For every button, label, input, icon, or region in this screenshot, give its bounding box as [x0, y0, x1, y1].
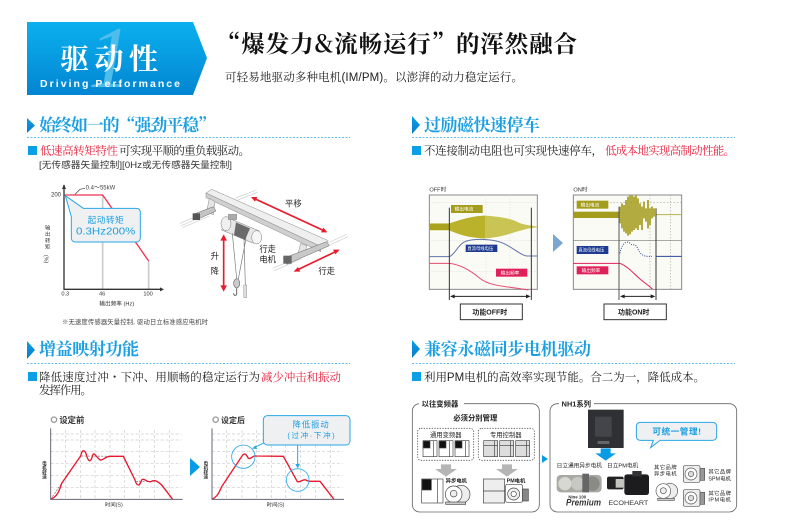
chart: OFF waveform: 输出频率 [501, 269, 520, 276]
diagram: conventional inverter [412, 399, 539, 512]
diagram: conventional inverter: 以往变频器 [422, 399, 459, 408]
description [28, 369, 342, 398]
banner: 驱动性 [27, 10, 207, 107]
chart: output torque vs frequency: 0.4～55kW [86, 185, 116, 191]
chart: before setting [42, 415, 183, 509]
description [412, 142, 735, 158]
chart: output torque vs frequency: 输出频率 (Hz) [99, 299, 134, 307]
description: 不连接制动电阻也可实现快速停车， [424, 142, 603, 158]
chart: ON waveform: ON时 [573, 186, 588, 194]
heading: 始终如一的强劲平稳 [27, 111, 350, 138]
diagram: conventional inverter: PM电机 [507, 476, 526, 484]
description [28, 142, 250, 170]
description: 利用PM电机的高效率实现节能。合二为一，降低成本。 [424, 369, 705, 385]
callout: 起动转矩 [65, 196, 140, 242]
diagram: NH1 series [550, 399, 737, 512]
callout: 起动转矩: 起动转矩 [88, 214, 124, 225]
description: [无传感器矢量控制][0Hz或无传感器矢量控制] [39, 159, 232, 170]
chart: ON waveform: 输出电流 [581, 201, 600, 208]
arrow: to NH1 [542, 455, 548, 463]
motor photos [557, 471, 649, 495]
chart: OFF waveform [429, 186, 537, 320]
arrow: OFF to ON [553, 234, 563, 252]
callout: 起动转矩: 0.3Hz200% [76, 227, 135, 238]
chart: before setting: 时间(S) [105, 501, 123, 509]
chart: after setting: 时间(S) [267, 501, 285, 509]
chart: output torque vs frequency: 输出转矩 [44, 224, 50, 251]
arrow: before to after [190, 458, 200, 476]
chart: output torque vs frequency: 200 [51, 193, 62, 199]
description: 低速高转矩特性 [40, 142, 118, 158]
chart: OFF waveform: 直流母线电压 [467, 245, 494, 252]
label: 功能OFF时: 功能OFF时 [472, 308, 507, 317]
callout: 降低振动: (过冲·下冲) [287, 430, 335, 440]
callout: 降低振动: 降低振动 [293, 419, 329, 429]
arrows: motion directions [220, 197, 340, 292]
subtitle: 可轻易地驱动多种电机(IM/PM)。以澎湃的动力稳定运行。 [225, 69, 523, 85]
description: 降低速度过冲・下冲、用顺畅的稳定运行为 [39, 369, 260, 385]
diagram: NH1 series: 异步电机 [654, 470, 677, 478]
panel: 兼容永磁同步电机驱动 [412, 335, 737, 512]
panel: 增益映射功能 [27, 335, 350, 509]
crane labels: 行走 [259, 244, 277, 254]
heading: 始终如一的强劲平稳: 始终如一的“强劲平稳” [39, 111, 215, 136]
footnote: ※无速度传感器矢量控制, 驱动日立标准感应电机时 [62, 317, 209, 326]
diagram: NH1 series: 其它品牌 [708, 489, 732, 497]
chart: output torque vs frequency: (%) [43, 255, 49, 264]
diagram: NH1 series: IPM电机 [708, 496, 732, 504]
description: 低成本地实现高制动性能。 [605, 142, 735, 158]
heading: 增益映射功能: 增益映射功能 [39, 335, 139, 360]
chart: OFF waveform: 输出电流 [455, 206, 474, 213]
diagram: NH1 series: Premium [566, 497, 601, 507]
crane labels: 电机 [259, 254, 277, 264]
diagram: NH1 series: NH1系列 [562, 399, 591, 408]
description: 可实现平顺的重负载驱动。 [119, 142, 250, 158]
banner: 驱动性: Driving Performance [40, 78, 180, 90]
title: “爆发力&流畅运行”的浑然融合 [217, 25, 577, 59]
chart: output torque vs frequency [43, 184, 164, 307]
banner: 驱动性: 1 [88, 10, 132, 107]
diagram: conventional inverter: 专用控制器 [490, 430, 522, 439]
crane labels: 行走 [318, 266, 336, 276]
callout: 降低振动 [263, 416, 350, 445]
diagram: conventional inverter: 异步电机 [446, 476, 468, 484]
diagram: NH1 series: Nine 100 [568, 495, 587, 500]
chart: before setting: 设定前 [59, 415, 84, 425]
callout: 可统一管理 [636, 422, 717, 448]
diagram: NH1 series: 其它品牌 [654, 463, 677, 471]
inverter photo [588, 410, 624, 448]
diagram: conventional inverter: 必须分别管理 [453, 414, 498, 423]
chart: ON waveform: 直流母线电压 [578, 247, 605, 254]
chart: OFF waveform: OFF时 [429, 186, 447, 194]
diagram: conventional inverter: 通用变频器 [430, 430, 462, 439]
chart: ON waveform [573, 186, 682, 320]
chart: after setting: 电机转速 [203, 460, 209, 481]
panel: 过励磁快速停车 [412, 111, 735, 320]
heading: 增益映射功能 [27, 335, 350, 364]
chart: after setting [203, 415, 350, 509]
description: 减少冲击和振动 [261, 369, 342, 385]
panel: 始终如一的强劲平稳 [27, 111, 350, 326]
crane labels: 升 [211, 251, 219, 261]
diagram: NH1 series: 其它品牌 [708, 468, 732, 476]
label: 功能ON时: 功能ON时 [618, 308, 649, 317]
heading: 兼容永磁同步电机驱动 [412, 335, 735, 364]
diagram: NH1 series: 日立PM电机 [607, 462, 639, 470]
chart: output torque vs frequency: 0.3 [61, 292, 69, 298]
crane labels: 平移 [285, 199, 302, 209]
diagram: NH1 series: SPM电机 [708, 474, 732, 482]
illustration: crane [180, 189, 348, 298]
crane labels: 降 [211, 266, 220, 276]
callout: 可统一管理: 可统一管理! [652, 426, 701, 437]
chart: output torque vs frequency: 46 [99, 292, 105, 298]
heading: 兼容永磁同步电机驱动: 兼容永磁同步电机驱动 [424, 335, 591, 360]
chart: ON waveform: 输出频率 [582, 267, 601, 274]
description: 发挥作用。 [39, 382, 92, 398]
chart: after setting: 设定后 [221, 415, 245, 425]
crane labels [211, 199, 336, 276]
diagram: NH1 series: ECOHEART [608, 500, 648, 507]
banner: 驱动性: 驱动性 [60, 37, 158, 78]
heading: 过励磁快速停车 [412, 111, 735, 138]
chart: output torque vs frequency: 100 [143, 292, 153, 298]
diagram: NH1 series: 日立通用异步电机 [557, 462, 602, 470]
heading: 过励磁快速停车: 过励磁快速停车 [424, 111, 540, 136]
chart: before setting: 电机转速 [42, 460, 47, 481]
